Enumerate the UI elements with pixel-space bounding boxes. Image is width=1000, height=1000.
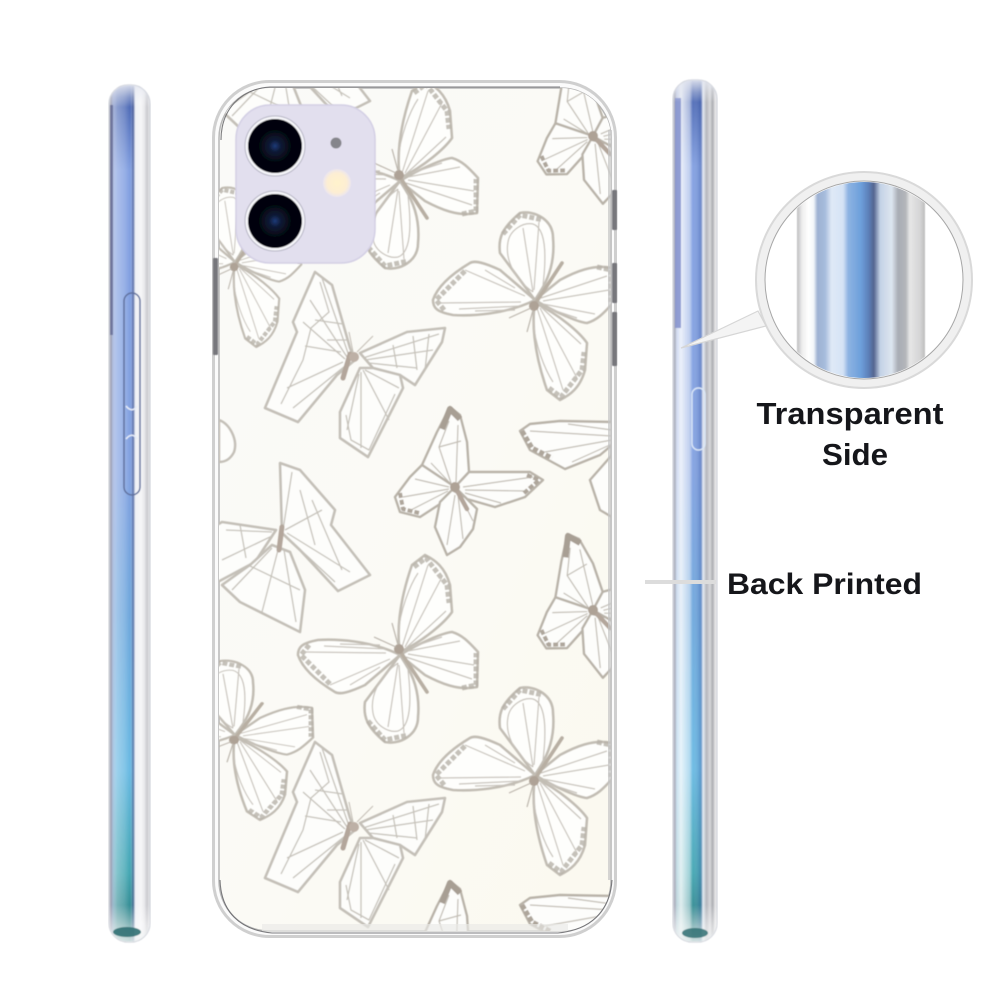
- jagged butterfly top fragment: [225, 88, 372, 128]
- label: Back Printed: Back Printed: [727, 568, 922, 601]
- butterfly print pattern: [219, 88, 611, 931]
- butterfly lower left: [219, 659, 315, 822]
- magnifier inner outline: [765, 181, 963, 379]
- butterfly bottom centre fragment: [424, 879, 470, 931]
- magnified side stripes: [797, 180, 925, 380]
- case inner dark edge: [220, 87, 612, 933]
- icon: left side buttons: [124, 293, 140, 495]
- right strip bottom teal reflection: [682, 928, 708, 938]
- case right inner grey band: [608, 130, 612, 880]
- butterfly top centre: [368, 88, 480, 270]
- case side buttons: [213, 190, 617, 366]
- butterfly right cut off: [520, 421, 612, 517]
- camera module: [236, 105, 375, 263]
- case outer rim: [214, 82, 616, 936]
- left strip bottom teal reflection: [113, 927, 141, 937]
- callout line: back printed: [645, 580, 716, 584]
- left strip bottom cap: [109, 905, 150, 942]
- icon: right side button outline: [692, 388, 705, 450]
- butterfly centre lower: [298, 555, 478, 743]
- butterfly bottom right fragment: [518, 893, 608, 931]
- right side view of phone case: [673, 80, 717, 942]
- small wing fragment left edge: [219, 420, 235, 462]
- label: Transparent Side: Transparent: [756, 396, 944, 431]
- camera plate: [236, 105, 375, 263]
- microphone dot: [330, 138, 342, 148]
- label: Transparent Side: Side: [822, 437, 888, 472]
- jagged butterfly bottom left: [265, 742, 445, 927]
- left strip inner dark edge: [110, 105, 113, 335]
- right side strip colour band: [673, 80, 717, 942]
- butterfly middle right cut off: [536, 532, 611, 680]
- jagged butterfly middle left: [212, 463, 370, 632]
- case back printed area: [219, 88, 611, 931]
- callout pointer: [681, 311, 766, 348]
- butterfly upper right large: [433, 212, 613, 400]
- back view of phone case: [212, 80, 618, 938]
- jagged butterfly upper left: [265, 272, 445, 457]
- label: Transparent Side: [756, 396, 944, 472]
- left strip top cap: [109, 85, 150, 107]
- camera flash: [323, 169, 351, 197]
- left side view of phone case: [109, 85, 150, 942]
- right side strip highlights: [673, 80, 717, 942]
- magnifier ring: [756, 172, 972, 388]
- case bottom translucent band: [262, 924, 568, 932]
- butterfly upper left under camera: [219, 186, 303, 348]
- right strip top cap: [673, 80, 717, 102]
- butterfly centre small: [395, 407, 543, 555]
- butterfly top right: [536, 88, 611, 206]
- right strip lavender upper edge: [675, 98, 681, 328]
- upper lens: [245, 116, 305, 176]
- callout: transparent side magnifier: [681, 172, 972, 388]
- lower lens: [245, 191, 305, 251]
- right strip bottom cap: [673, 905, 717, 942]
- butterfly lower right large: [433, 687, 613, 875]
- left side strip colour band: [109, 85, 150, 942]
- left side strip highlights: [109, 85, 150, 942]
